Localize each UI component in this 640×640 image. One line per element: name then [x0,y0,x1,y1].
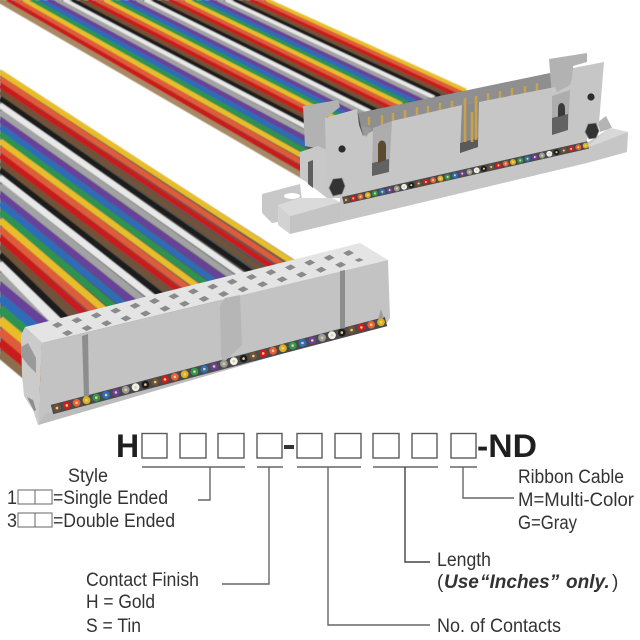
label: ribbon cable: M=Multi-Color [518,490,635,511]
label: length: Length [437,550,491,571]
label: ribbon cable: Ribbon Cable [518,467,624,488]
front wall [325,62,604,222]
wire contact band [343,145,588,200]
label: style [7,466,175,532]
label: contact finish: S = Tin [86,616,141,637]
wire contact band [52,322,386,410]
style heading: Style [68,466,108,487]
label: contact finish: H = Gold [86,592,155,613]
polarity triangle [361,126,372,137]
left side face [21,327,42,425]
double ended row: =Double Ended [53,511,175,532]
label: contact finish [86,570,199,637]
suffix ND: -ND [477,428,537,464]
left end side face [300,146,327,198]
upper ribbon cable [0,0,466,180]
side latch window [21,343,36,373]
part number placeholder boxes [142,434,476,458]
label: ribbon cable [518,467,635,534]
lower side notch [27,397,36,411]
mounting holes [329,93,599,196]
single ended row [7,488,168,509]
right foot of upper connector [587,116,628,163]
label: contact finish: Contact Finish [86,570,199,591]
left groove [82,334,89,398]
label: ribbon cable: G=Gray [518,513,577,534]
front foot [278,193,340,234]
right groove [340,270,345,329]
label: length: only. [566,572,610,593]
socket holes [52,250,364,336]
label: number of contacts: No. of Contacts [437,616,561,637]
lower front lip [38,323,387,425]
right latch ear [549,53,587,96]
center slot with tall pins [460,96,479,153]
center tab [220,295,242,362]
leader lines [142,467,514,625]
label: length [437,550,618,593]
upper connector: header with latches [262,53,628,234]
hyphen [284,445,294,449]
lower connector: socket housing [21,243,390,425]
pin row [369,83,537,129]
label: length: “Inches” [480,572,560,593]
label: length: ( [437,572,444,593]
upper contact dots [344,144,588,202]
double ended row [7,511,175,532]
double ended row: 3 [7,511,17,532]
label: length: ) [612,572,618,593]
left latch notch [372,121,392,176]
rear foot tab [262,184,302,223]
part number prefix H: H [116,428,139,464]
right latch notch [552,90,570,135]
polarity triangle [378,309,384,319]
top surface [25,243,388,343]
part number heading [116,428,537,464]
side slit [308,160,313,188]
front face [38,260,390,425]
left latch ear [303,100,340,150]
inner trough wall [358,73,558,136]
single ended row: =Single Ended [53,488,168,509]
lower ribbon cable [0,70,299,403]
single ended row: 1 [7,488,17,509]
label: length: Use [444,572,479,593]
lower contact dots [54,320,384,411]
